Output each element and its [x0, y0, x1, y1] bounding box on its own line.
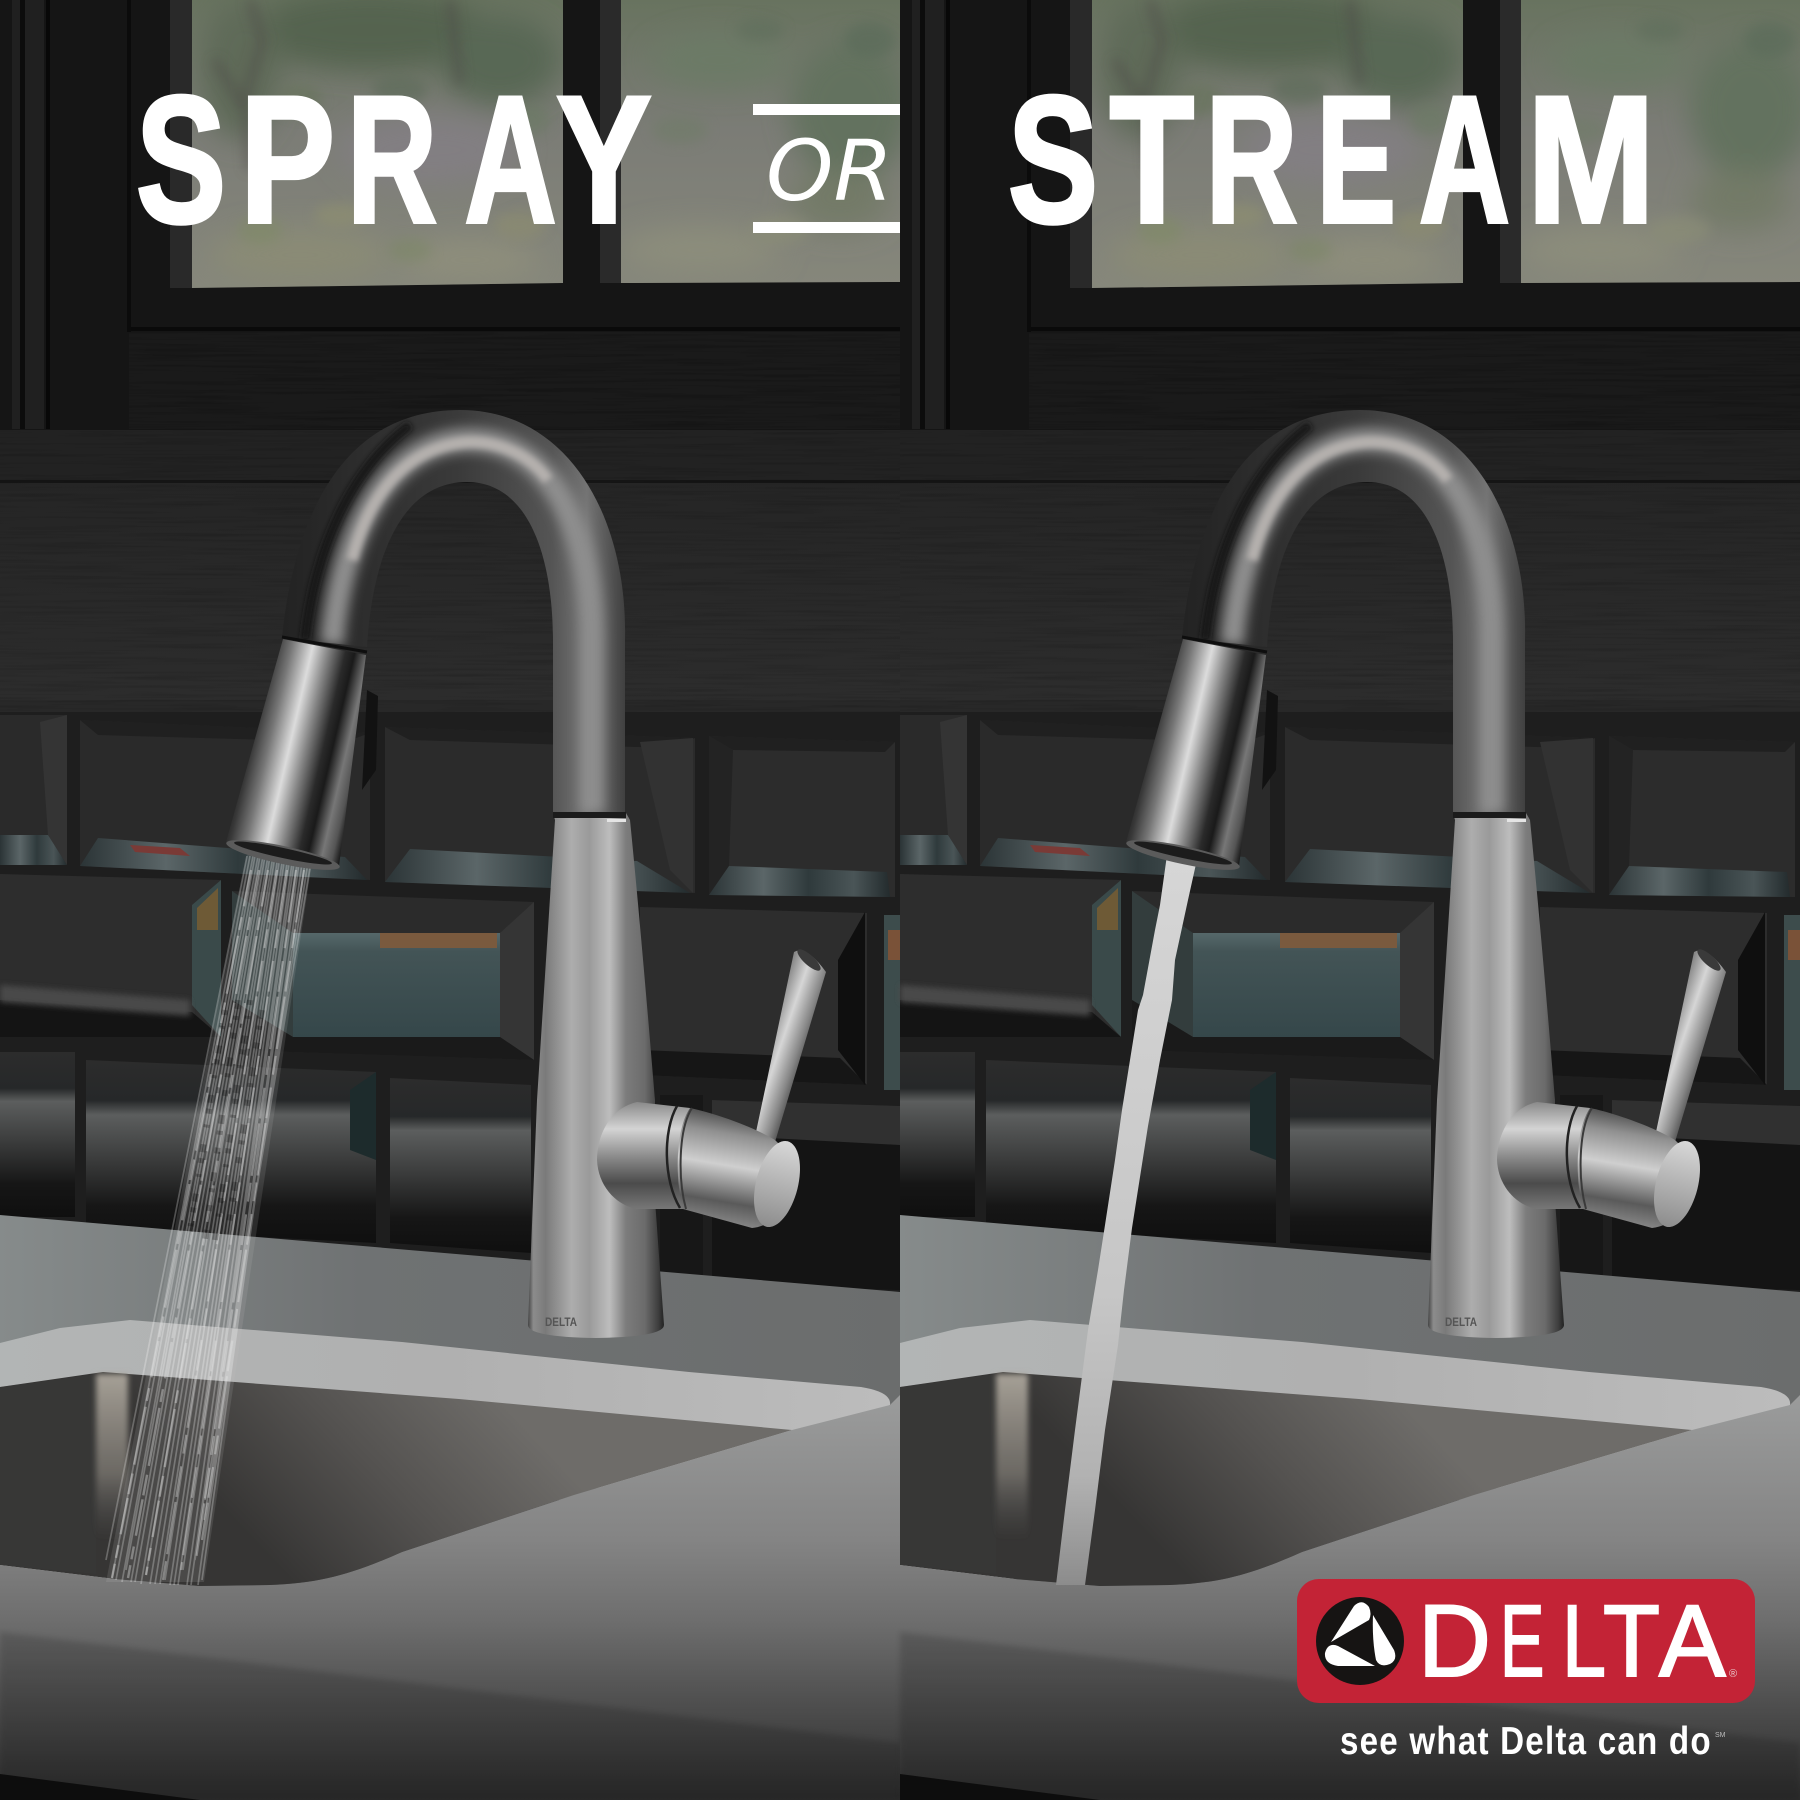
heading: SPRAY: S [136, 59, 226, 261]
wordmark DELTA: A [1659, 1584, 1726, 1698]
right scene tile backsplash [900, 712, 1800, 1302]
glossy subway tile backsplash [0, 712, 900, 1302]
wordmark DELTA: E [1500, 1584, 1544, 1698]
heading: SPRAY: R [347, 59, 437, 261]
heading: OR with rules: OR [766, 122, 893, 220]
tagline: SM [1715, 1732, 1726, 1739]
right scene wall and wood panel [900, 0, 1800, 1800]
pull-down faucet, stream setting [1124, 410, 1726, 1338]
wordmark DELTA: T [1603, 1584, 1660, 1698]
heading: STREAM: E [1316, 59, 1396, 261]
spray water pattern [106, 855, 313, 1585]
window with blurred foliage [0, 0, 910, 430]
icon: Delta tri-blade mark [1316, 1597, 1404, 1685]
heading: STREAM: A [1419, 59, 1510, 261]
heading: STREAM: R [1206, 59, 1298, 261]
right scene counter and sink [900, 1215, 1800, 1800]
heading: OR with rules [753, 104, 900, 233]
right faucet base mark: DELTA [1445, 1315, 1477, 1329]
panel: stream (right kitchen scene) [900, 0, 1800, 1800]
registered mark: ® [1729, 1668, 1737, 1680]
logo: Delta red badge [1297, 1579, 1755, 1703]
panel: spray (left kitchen scene) [0, 0, 910, 1800]
heading: SPRAY: Y [556, 59, 651, 261]
wordmark DELTA: L [1562, 1584, 1606, 1698]
heading: SPRAY: A [464, 59, 556, 261]
wall and wood panel [0, 0, 900, 1800]
stream water column [1056, 855, 1198, 1585]
heading: STREAM: S [1008, 59, 1098, 261]
heading: STREAM: T [1110, 59, 1194, 261]
pull-down faucet, spray setting [224, 410, 826, 1338]
heading: STREAM: M [1527, 59, 1655, 261]
faucet base mark: DELTA [545, 1315, 577, 1329]
heading: SPRAY: P [240, 59, 335, 261]
wordmark DELTA: D [1418, 1584, 1491, 1698]
right scene window [900, 0, 1800, 430]
tagline: see what Delta can do [1340, 1718, 1711, 1763]
marble counter and sink [0, 1215, 900, 1800]
